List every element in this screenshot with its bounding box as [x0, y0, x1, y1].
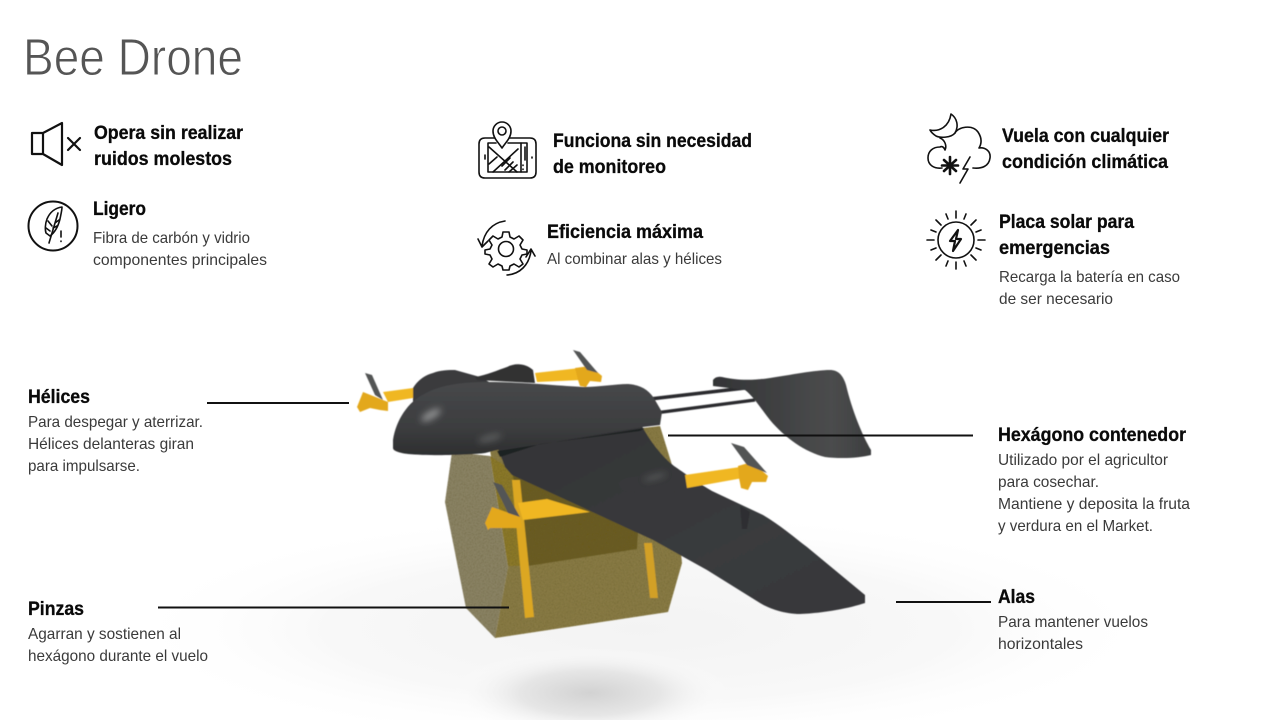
left propeller arm: [357, 373, 413, 412]
tail wing: [713, 370, 871, 458]
feature: lightweight: [28, 199, 267, 269]
description: Agarran y sostienen al: [28, 626, 181, 643]
icon: map on tablet with pin: [479, 122, 536, 178]
heading: solar panel: Placa solar para: [999, 212, 1134, 233]
leader line: [668, 434, 973, 436]
feature: no monitoring: [479, 122, 752, 178]
leader line: [896, 601, 991, 603]
hexagon container: left bright strip: [490, 456, 527, 566]
icon detail: snowflake: [942, 157, 958, 174]
rear propeller arm: [535, 350, 602, 387]
heading: no monitoring: Funciona sin necesidad: [553, 131, 752, 152]
description: Para despegar y aterrizar.: [28, 414, 203, 431]
icon: storm cloud with moon and snowflake: [928, 114, 990, 183]
callout: Hexágono contenedor: Mantiene y deposita la fruta: [998, 496, 1190, 513]
callout: Hélices: [28, 387, 349, 475]
leader line: [207, 402, 349, 404]
rear wing left: [413, 370, 500, 402]
heading: any weather: Vuela con cualquier: [1002, 126, 1170, 147]
callout: Hexágono contenedor: [668, 425, 1190, 535]
feature: lightweight: componentes principales: [93, 252, 267, 269]
pincer leg left: [512, 480, 534, 618]
icon: gear with arrows: [478, 221, 535, 275]
callout: Hexágono contenedor: y verdura en el Market.: [998, 518, 1153, 535]
description: solar panel: Recarga la batería en caso: [999, 269, 1180, 286]
heading: silent operation: Opera sin realizar: [94, 123, 244, 144]
hexagon container: [445, 426, 682, 638]
heading: efficiency: Eficiencia máxima: [547, 222, 703, 243]
ground shadow: [120, 480, 1160, 720]
callout: Pinzas: hexágono durante el vuelo: [28, 648, 208, 665]
callout: Hélices: para impulsarse.: [28, 458, 140, 475]
description: Utilizado por el agricultor: [998, 452, 1169, 469]
callout: Hexágono contenedor: para cosechar.: [998, 474, 1099, 491]
fuselage: [393, 382, 662, 455]
tail booms: [650, 388, 755, 413]
feature: silent operation: [32, 123, 244, 170]
feature: any weather: [928, 114, 1170, 183]
feature: solar panel: emergencias: [999, 238, 1110, 259]
feature: solar panel: de ser necesario: [999, 291, 1113, 308]
drone illustration: [357, 350, 871, 638]
feature: efficiency: [478, 221, 722, 275]
callout: Hélices: Hélices delanteras giran: [28, 436, 194, 453]
front left propeller arm: [485, 482, 590, 530]
leader line: [158, 606, 509, 608]
feature: solar panel: [927, 211, 1180, 308]
main wing: [497, 423, 865, 614]
heading: Hélices: [28, 387, 90, 408]
icon: feather: [28, 202, 78, 250]
hexagon container: left face: [445, 452, 508, 638]
wing streak: [740, 506, 750, 529]
icon: sun with bolt: [927, 211, 985, 269]
description: lightweight: Fibra de carbón y vidrio: [93, 230, 250, 247]
feature: any weather: condición climática: [1002, 152, 1168, 173]
icon: muted speaker: [32, 123, 80, 165]
heading: Hexágono contenedor: [998, 425, 1187, 446]
heading: Alas: [998, 587, 1035, 608]
pincer leg right: [644, 543, 658, 598]
hexagon container: dark inner band: [494, 468, 640, 566]
callout: Alas: horizontales: [998, 636, 1083, 653]
description: Para mantener vuelos: [998, 614, 1148, 631]
heading: lightweight: Ligero: [93, 199, 146, 220]
description: efficiency: Al combinar alas y hélices: [547, 251, 722, 268]
fuselage gap shadow: [497, 428, 645, 457]
callout: Pinzas: [28, 599, 509, 665]
title: Bee Drone: [23, 29, 243, 87]
heading: Pinzas: [28, 599, 84, 620]
wing nacelle: [618, 470, 685, 493]
front right propeller arm: [685, 443, 768, 490]
rear nacelle: [475, 364, 535, 383]
hexagon container: front face: [490, 426, 682, 638]
feature: silent operation: ruidos molestos: [94, 149, 232, 170]
callout: Alas: [896, 587, 1148, 653]
feature: no monitoring: de monitoreo: [553, 157, 666, 178]
fuselage highlights: [419, 406, 667, 482]
